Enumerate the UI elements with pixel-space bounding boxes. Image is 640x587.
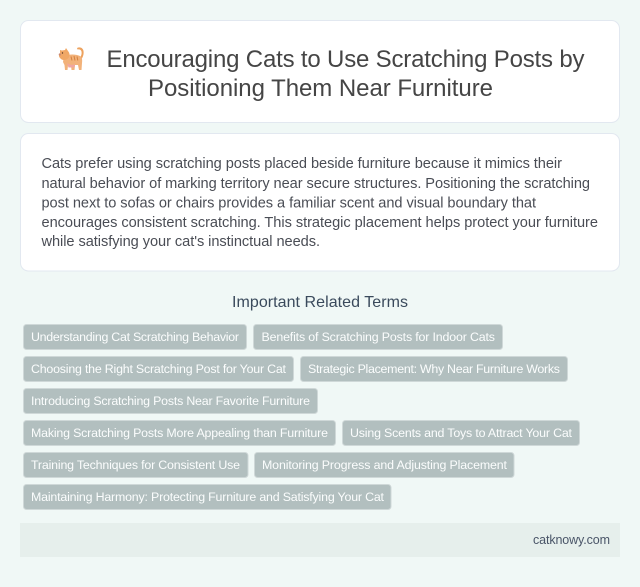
tag: Introducing Scratching Posts Near Favorite Furniture — [31, 394, 310, 408]
body line 3: post next to sofas or chairs provides a familiar scent and visual boundary that — [42, 196, 536, 212]
tag: Maintaining Harmony: Protecting Furniture and Satisfying Your Cat — [31, 490, 385, 504]
tag — [24, 388, 318, 414]
body line 4: encourages consistent scratching. This strategic placement helps protect your furniture — [42, 215, 598, 231]
tag — [24, 420, 336, 446]
tag — [24, 484, 391, 510]
body line 5: while satisfying your cat's instinctual needs. — [40, 234, 320, 250]
tag — [24, 452, 248, 478]
footer — [20, 523, 620, 557]
tag — [24, 356, 294, 382]
tag — [300, 356, 568, 382]
title line 1: Encouraging Cats to Use Scratching Posts by — [106, 46, 584, 73]
title line 2: Positioning Them Near Furniture — [148, 75, 493, 102]
tag: Training Techniques for Consistent Use — [31, 458, 240, 472]
tag — [24, 324, 246, 350]
tag: Strategic Placement: Why Near Furniture Works — [308, 362, 560, 376]
tag: Benefits of Scratching Posts for Indoor Cats — [262, 330, 495, 344]
heading: related terms: Important Related Terms — [232, 294, 408, 311]
body line 2: natural behavior of marking territory near secure structures. Positioning the scratching — [42, 176, 590, 192]
tag — [254, 452, 514, 478]
tag: Making Scratching Posts More Appealing than Furniture — [31, 426, 328, 440]
panel: description — [20, 134, 620, 271]
tag: Using Scents and Toys to Attract Your Cat — [350, 426, 573, 440]
icon: orange cat — [59, 47, 84, 70]
footer source: catknowy.com — [533, 533, 610, 547]
tag: Choosing the Right Scratching Post for Your Cat — [31, 362, 287, 376]
tag: Understanding Cat Scratching Behavior — [31, 330, 239, 344]
tag — [342, 420, 580, 446]
tag list — [24, 324, 580, 510]
tag: Monitoring Progress and Adjusting Placement — [262, 458, 508, 472]
body line 1: Cats prefer using scratching posts placed beside furniture because it mimics their — [42, 156, 562, 172]
tag — [254, 324, 502, 350]
panel: title card — [20, 20, 620, 122]
